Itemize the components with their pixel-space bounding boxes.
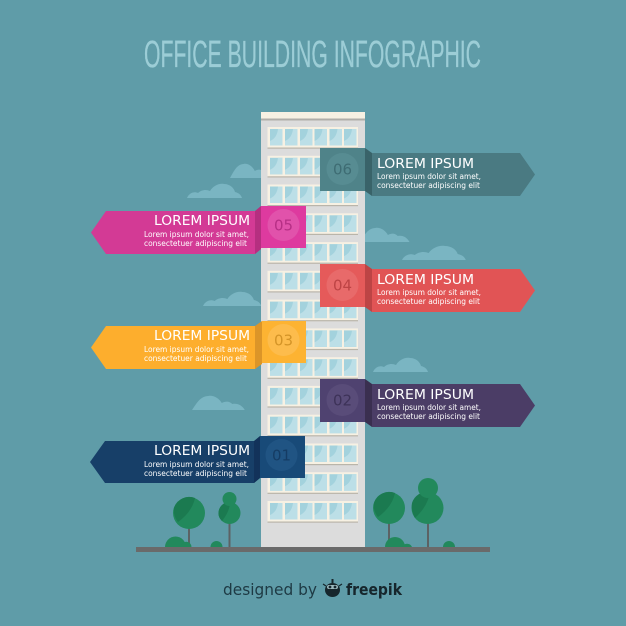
icon: freepik logo — [323, 579, 342, 597]
banner 01: LOREM IPSUM — [154, 444, 250, 459]
banner 01: 01 — [272, 446, 291, 464]
credit: designed by freepik — [223, 579, 402, 599]
banner 04: 04 — [333, 276, 352, 294]
banner 06: Lorem ipsum dolor sit amet, — [377, 172, 481, 181]
banner 01: Lorem ipsum dolor sit amet, — [144, 460, 249, 469]
banner 06: LOREM IPSUM — [377, 157, 474, 172]
banner 05: consectetuer adipiscing elit — [144, 239, 247, 248]
banner 01: consectetuer adipiscing elit — [144, 469, 247, 478]
banner 02: consectetuer adipiscing elit — [377, 412, 480, 421]
banner 02 — [320, 379, 535, 427]
banner 05: 05 — [274, 216, 293, 234]
banner 05: Lorem ipsum dolor sit amet, — [144, 230, 249, 239]
banner 04 — [320, 264, 535, 312]
banner 03: Lorem ipsum dolor sit amet, — [144, 345, 249, 354]
credit: designed by freepik: designed by — [223, 580, 317, 599]
banner 06: 06 — [333, 160, 352, 178]
banner 02: LOREM IPSUM — [377, 388, 474, 403]
banner 02: 02 — [333, 392, 352, 410]
banner 01 — [90, 436, 305, 483]
building — [261, 112, 365, 547]
banner 06: consectetuer adipiscing elit — [377, 181, 480, 190]
banner 03: consectetuer adipiscing elit — [144, 354, 247, 363]
banner 03 — [91, 321, 306, 369]
credit: designed by freepik: freepik — [346, 580, 402, 599]
banner 06 — [320, 148, 535, 196]
banner 03: 03 — [274, 332, 293, 350]
banner 03: LOREM IPSUM — [154, 329, 250, 344]
banner 04: consectetuer adipiscing elit — [377, 297, 480, 306]
ground — [136, 547, 490, 552]
clouds — [187, 164, 466, 410]
banner 05: LOREM IPSUM — [154, 214, 250, 229]
banner 04: Lorem ipsum dolor sit amet, — [377, 288, 481, 297]
banner 05 — [91, 206, 306, 254]
banner 02: Lorem ipsum dolor sit amet, — [377, 403, 481, 412]
trees and bushes — [165, 478, 455, 547]
banner 04: LOREM IPSUM — [377, 273, 474, 288]
